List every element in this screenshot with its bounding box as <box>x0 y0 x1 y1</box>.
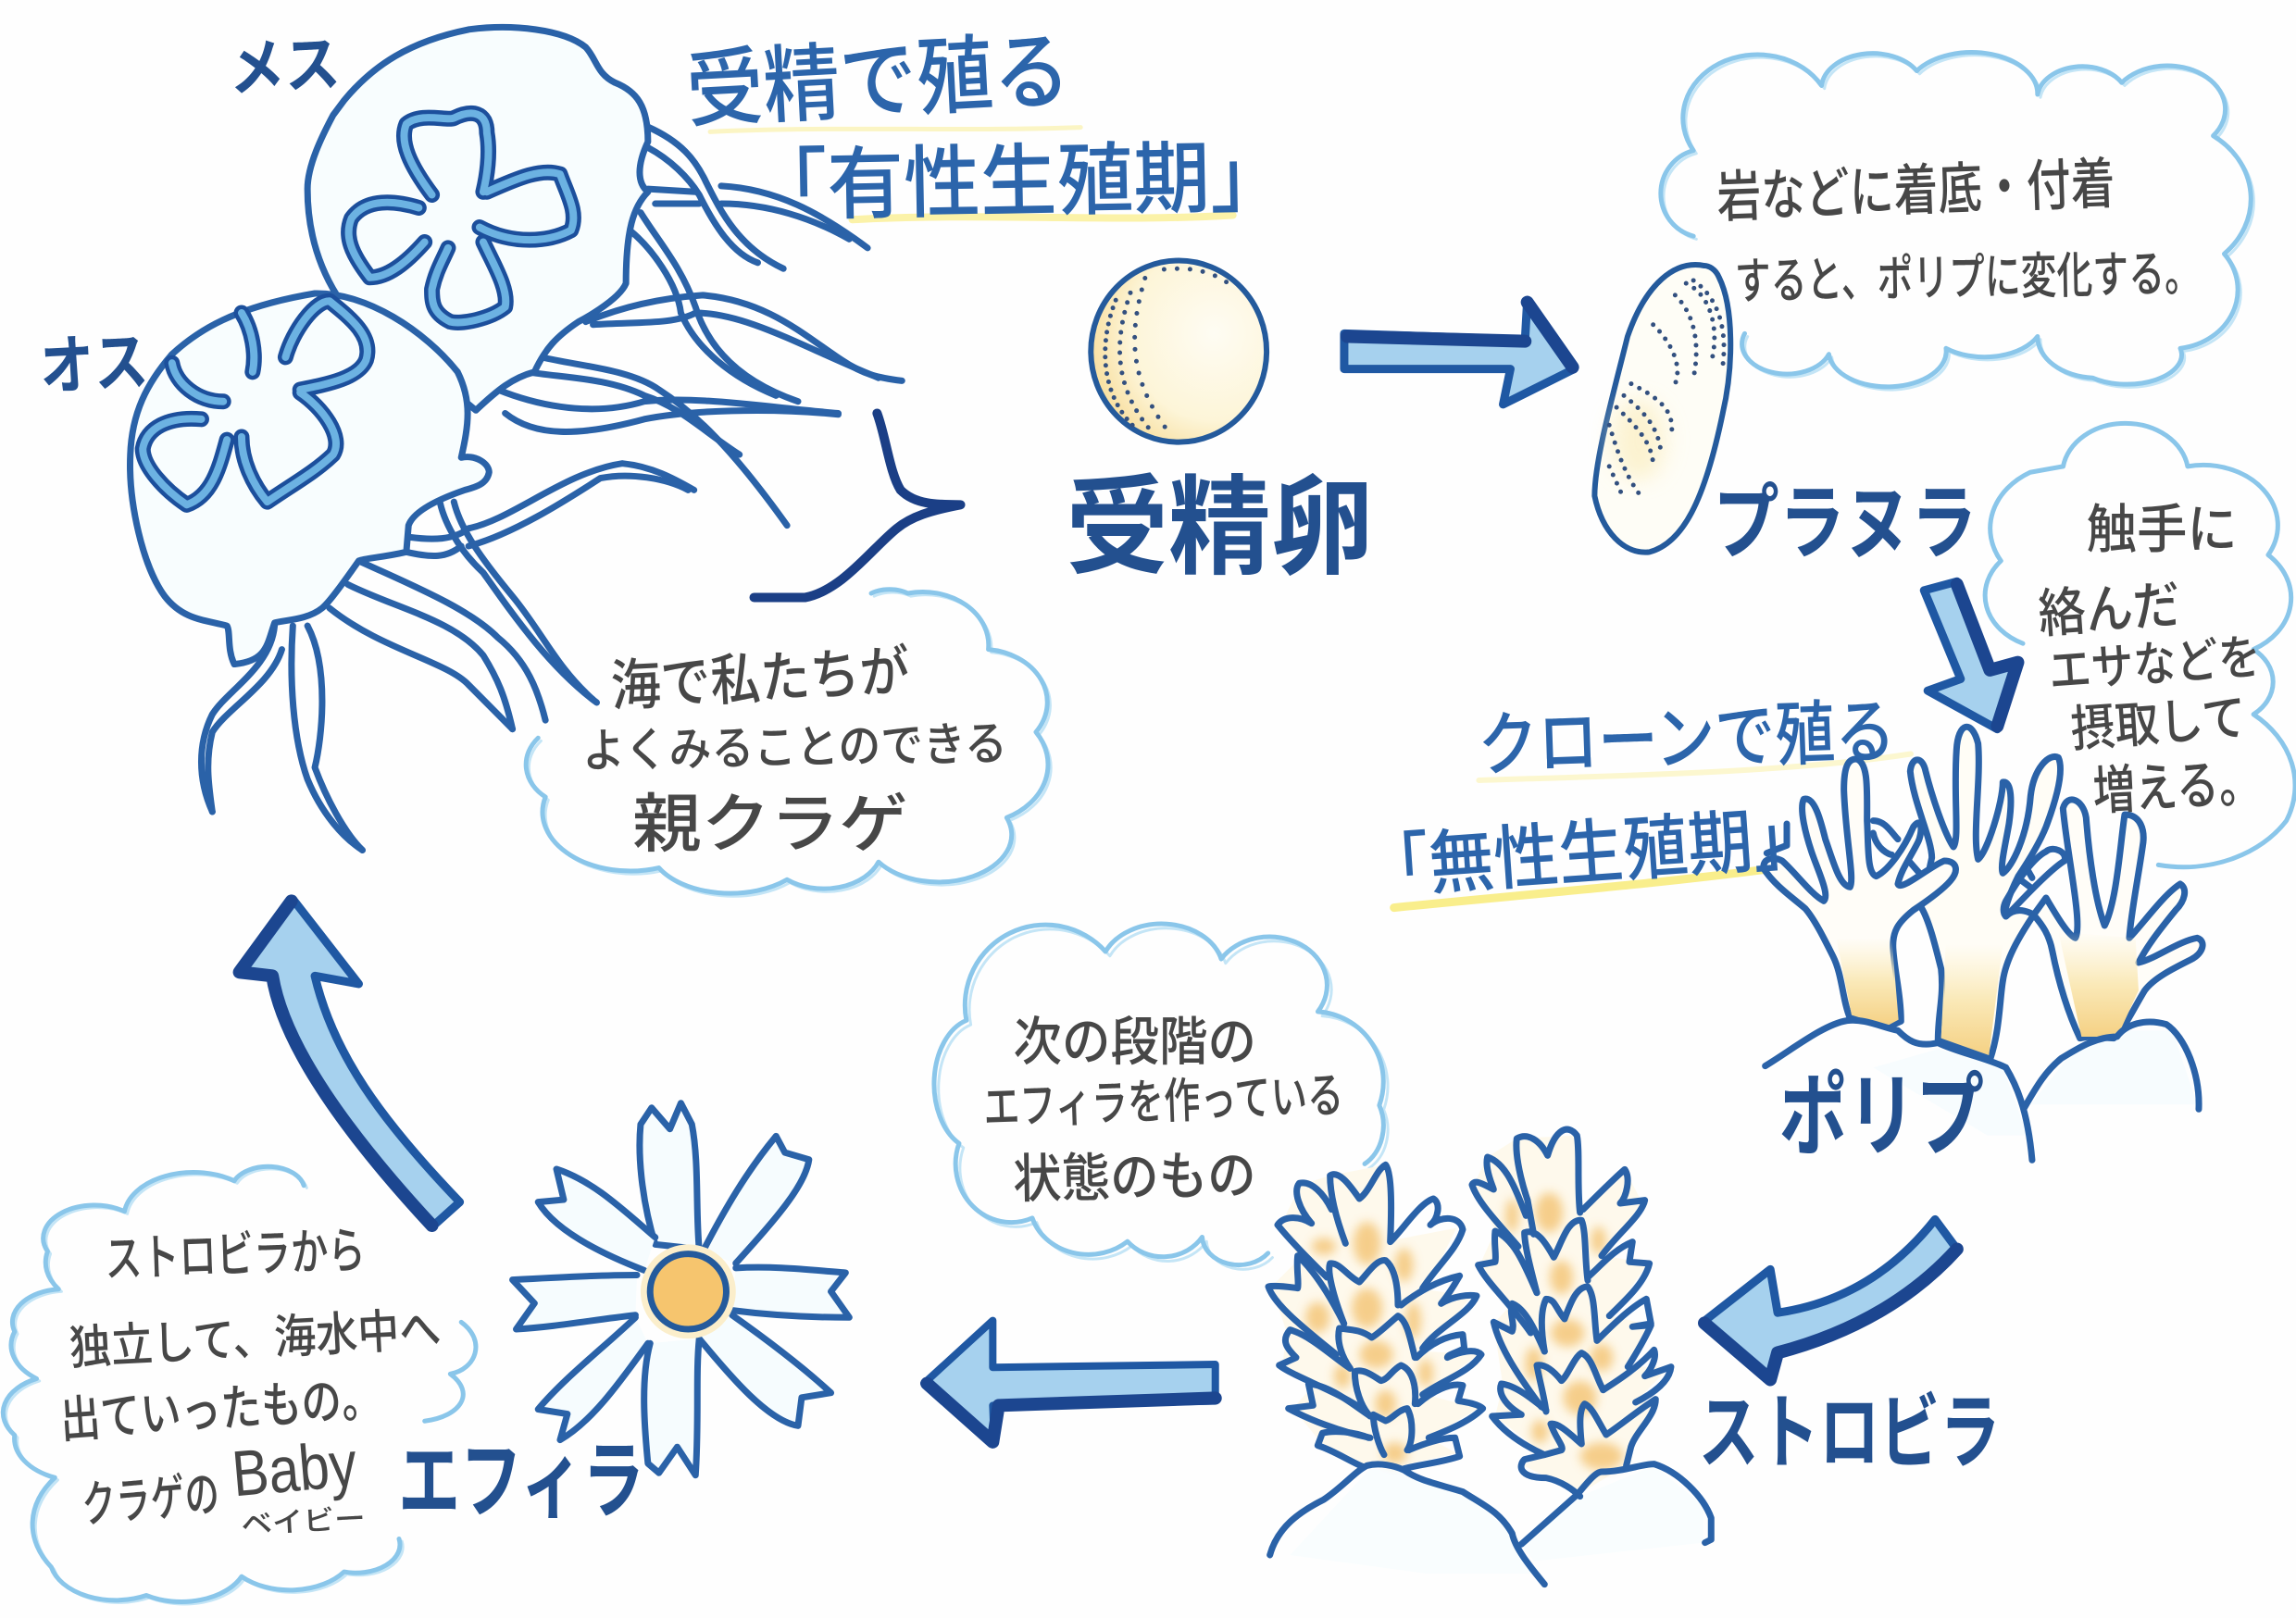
orange shading <box>1305 1192 1623 1470</box>
note: polyp: 触手に <box>2087 501 2238 560</box>
female bell <box>307 27 648 410</box>
note: strobila: 次の段階の <box>1013 1013 1256 1072</box>
note: planula <box>1716 153 2201 310</box>
arrow: ephyra to adult <box>238 899 460 1227</box>
panel: male jellyfish <box>131 293 961 850</box>
note: polyp: 絡んだ <box>2037 576 2182 644</box>
left strobila outline <box>1268 1164 1483 1469</box>
yellow highlights <box>710 128 1911 908</box>
male tentacles <box>201 464 694 850</box>
note: adult jellyfish: 海で私たちが <box>609 641 911 717</box>
rocks <box>2030 1030 2197 1104</box>
label: male: オス <box>38 326 150 404</box>
panel: female jellyfish <box>307 27 902 526</box>
note: ephyra: 出ていったもの。 <box>58 1371 383 1449</box>
arrow: polyp to strobila <box>1703 1219 1957 1381</box>
male clover <box>143 301 368 504</box>
arrow: egg to planula <box>1344 301 1574 404</box>
note: adult jellyfish: よくみることのできる <box>582 717 1007 778</box>
icon: polyps <box>1764 727 2202 1160</box>
heading: clone reproduction: クローンで殖る <box>1477 692 1896 786</box>
label: ephyra: エフィラ <box>398 1435 644 1529</box>
cloud: polyp note <box>1985 423 2295 867</box>
note: strobila: エフィラを作っている <box>982 1069 1344 1136</box>
note: ephyra: ストロビラから <box>104 1223 367 1288</box>
note: planula: 岩などに着底・付着 <box>1716 153 2116 229</box>
polyp 3 <box>2034 800 2202 1039</box>
strobila pale bodies and rocks <box>1271 1164 1479 1465</box>
female tentacles <box>498 127 902 526</box>
right strobila outline <box>1472 1129 1671 1497</box>
icon: fertilized egg <box>1091 261 1267 442</box>
bracket joining male and female <box>755 413 961 597</box>
label: female: メス <box>227 31 342 105</box>
heading: asexual reproduction period: 「無性生殖期」 <box>1362 799 1820 909</box>
note: strobila: 状態のもの <box>1013 1146 1256 1210</box>
cloud: planula note <box>1661 53 2253 390</box>
icon: planula <box>1594 265 1730 553</box>
note: ephyra <box>58 1223 443 1541</box>
note: polyp <box>2037 501 2263 822</box>
note: ephyra: Baby <box>230 1427 359 1510</box>
arrow: planula to polyp <box>1924 581 2019 729</box>
cloud: adult jellyfish <box>526 590 1051 896</box>
label: fertilized egg: 受精卵 <box>1066 467 1374 588</box>
note: ephyra: ベイビー <box>241 1504 367 1541</box>
cloud: ephyra note <box>3 1166 476 1604</box>
note: adult jellyfish <box>582 641 1007 860</box>
label: planula: プラヌラ <box>1713 478 1977 569</box>
icon: ephyra <box>513 1103 849 1475</box>
label: strobila: ストロビラ <box>1699 1387 2000 1478</box>
note: ephyra: クラゲの <box>80 1466 221 1534</box>
note: polyp: 摂取して <box>2069 690 2248 758</box>
polyp 2 <box>1910 727 2060 1058</box>
male bell <box>131 293 489 665</box>
icon: strobila <box>1268 1129 1711 1585</box>
cloud: strobila note <box>934 924 1388 1269</box>
note: polyp: エサなどを <box>2047 630 2263 699</box>
heading: sexual reproduction period: 「有性生殖期」 <box>750 134 1287 231</box>
female clover <box>349 113 573 322</box>
heading: sexual reproduction: 受精で殖る <box>684 24 1072 139</box>
strobila rocks outline <box>1270 1464 1711 1585</box>
arrow: strobila to ephyra <box>924 1321 1216 1442</box>
polyp 1 <box>1764 759 1955 1027</box>
note: strobila <box>982 1013 1344 1210</box>
mounds <box>1766 1020 2032 1160</box>
note: adult jellyfish: 親クラゲ <box>632 788 908 860</box>
label: polyp: ポリプ <box>1779 1065 1984 1167</box>
note: ephyra: 独立して、海水中へ <box>69 1302 443 1375</box>
